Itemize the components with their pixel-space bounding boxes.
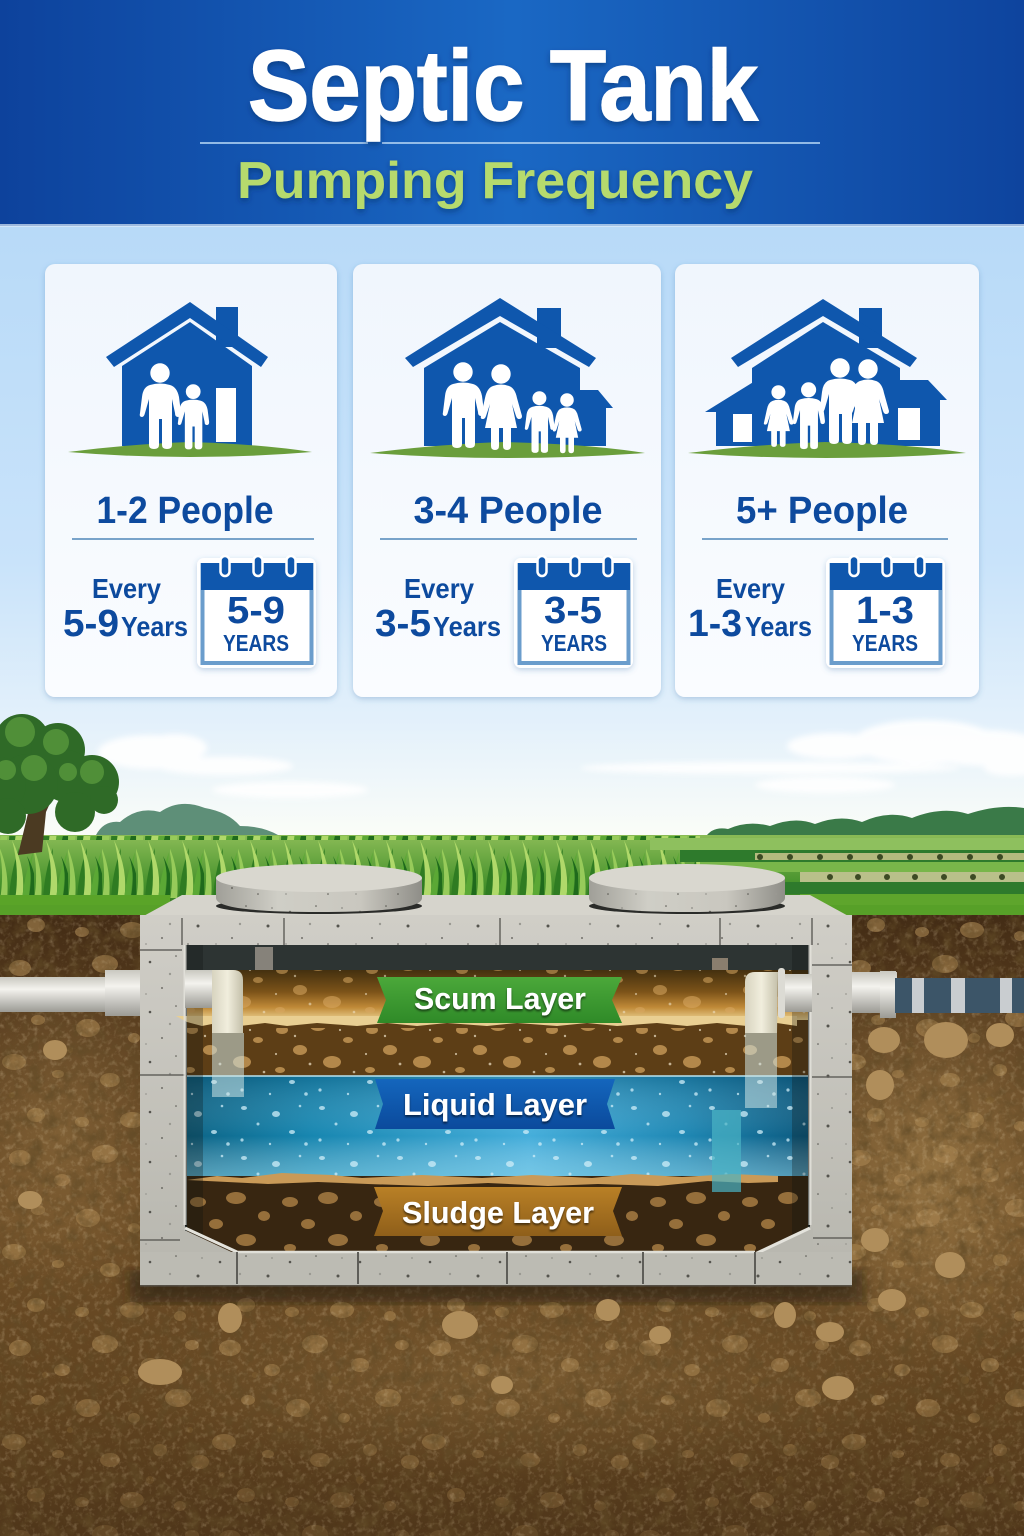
sky background [0, 226, 1024, 838]
clouds [98, 720, 1024, 798]
frequency text: Every [92, 573, 161, 604]
frequency text: Years [745, 611, 812, 642]
frequency text: 3-5 [375, 603, 431, 645]
frequency text [375, 573, 501, 645]
icon: house with family of five [688, 299, 966, 458]
lid left [216, 864, 422, 914]
title: Septic Tank [248, 30, 758, 142]
label: liquid layer [375, 1079, 615, 1129]
interior edge shading [194, 945, 801, 1252]
heading: 3-4 people: 3-4 People [414, 490, 602, 532]
frequency text: Years [121, 611, 188, 642]
rocks [18, 1022, 1014, 1400]
icon: calendar 1-3 years: YEARS [852, 630, 918, 656]
sludge layer [187, 1176, 808, 1252]
grass field [0, 835, 1024, 917]
label: sludge layer [374, 1187, 622, 1236]
liquid layer [187, 1076, 808, 1176]
scum layer [187, 970, 808, 1022]
tank walls [140, 915, 852, 1285]
bottom chamfers [180, 1228, 813, 1256]
septic tank [0, 864, 1024, 1285]
speckled brown layer [187, 1020, 808, 1078]
frequency text: 1-3 [688, 603, 742, 645]
icon: calendar 5-9 years: 5-9 [227, 590, 285, 632]
tank top slab [140, 895, 852, 918]
icon: calendar 5-9 years [197, 556, 316, 668]
label: scum layer: Scum Layer [414, 981, 586, 1016]
frequency text [688, 573, 812, 645]
icon: calendar 5-9 years: YEARS [223, 630, 289, 656]
label: sludge layer: Sludge Layer [402, 1195, 594, 1230]
frequency text: Every [404, 573, 474, 604]
bottom slab [140, 1252, 852, 1285]
frequency text: Years [433, 611, 501, 642]
striped fields [640, 838, 1024, 916]
tank interior [176, 945, 810, 1252]
icon: house with four people [370, 298, 645, 458]
distant tree line [96, 804, 1024, 838]
icon: calendar 3-5 years [514, 556, 633, 668]
heading: 5+ people: 5+ People [736, 490, 908, 532]
heading: 1-2 people: 1-2 People [96, 490, 274, 532]
icon: calendar 1-3 years: 1-3 [856, 590, 914, 632]
icon: calendar 3-5 years: YEARS [541, 630, 607, 656]
frequency text: Every [716, 573, 785, 604]
tank ground shadow [130, 1270, 862, 1302]
frequency text [63, 573, 188, 645]
outlet pipe [712, 968, 1024, 1192]
frequency text: 5-9 [63, 603, 119, 645]
header banner [0, 0, 1024, 227]
inner wall edges [185, 945, 810, 1225]
icon: calendar 1-3 years [826, 556, 945, 668]
icon: calendar 3-5 years: 3-5 [544, 590, 602, 632]
concrete joints [140, 918, 852, 1285]
inlet pipe [0, 970, 244, 1097]
icon: house with two people [68, 302, 312, 457]
lid right [589, 864, 785, 914]
panel: 5+ people [675, 264, 979, 697]
subtitle: Pumping Frequency [237, 152, 753, 210]
panel: 3-4 people [353, 264, 661, 697]
panel: 1-2 people [45, 264, 337, 697]
soil cross-section [0, 915, 1024, 1536]
tree [0, 714, 119, 855]
label: scum layer [377, 977, 622, 1023]
label: liquid layer: Liquid Layer [403, 1087, 587, 1122]
